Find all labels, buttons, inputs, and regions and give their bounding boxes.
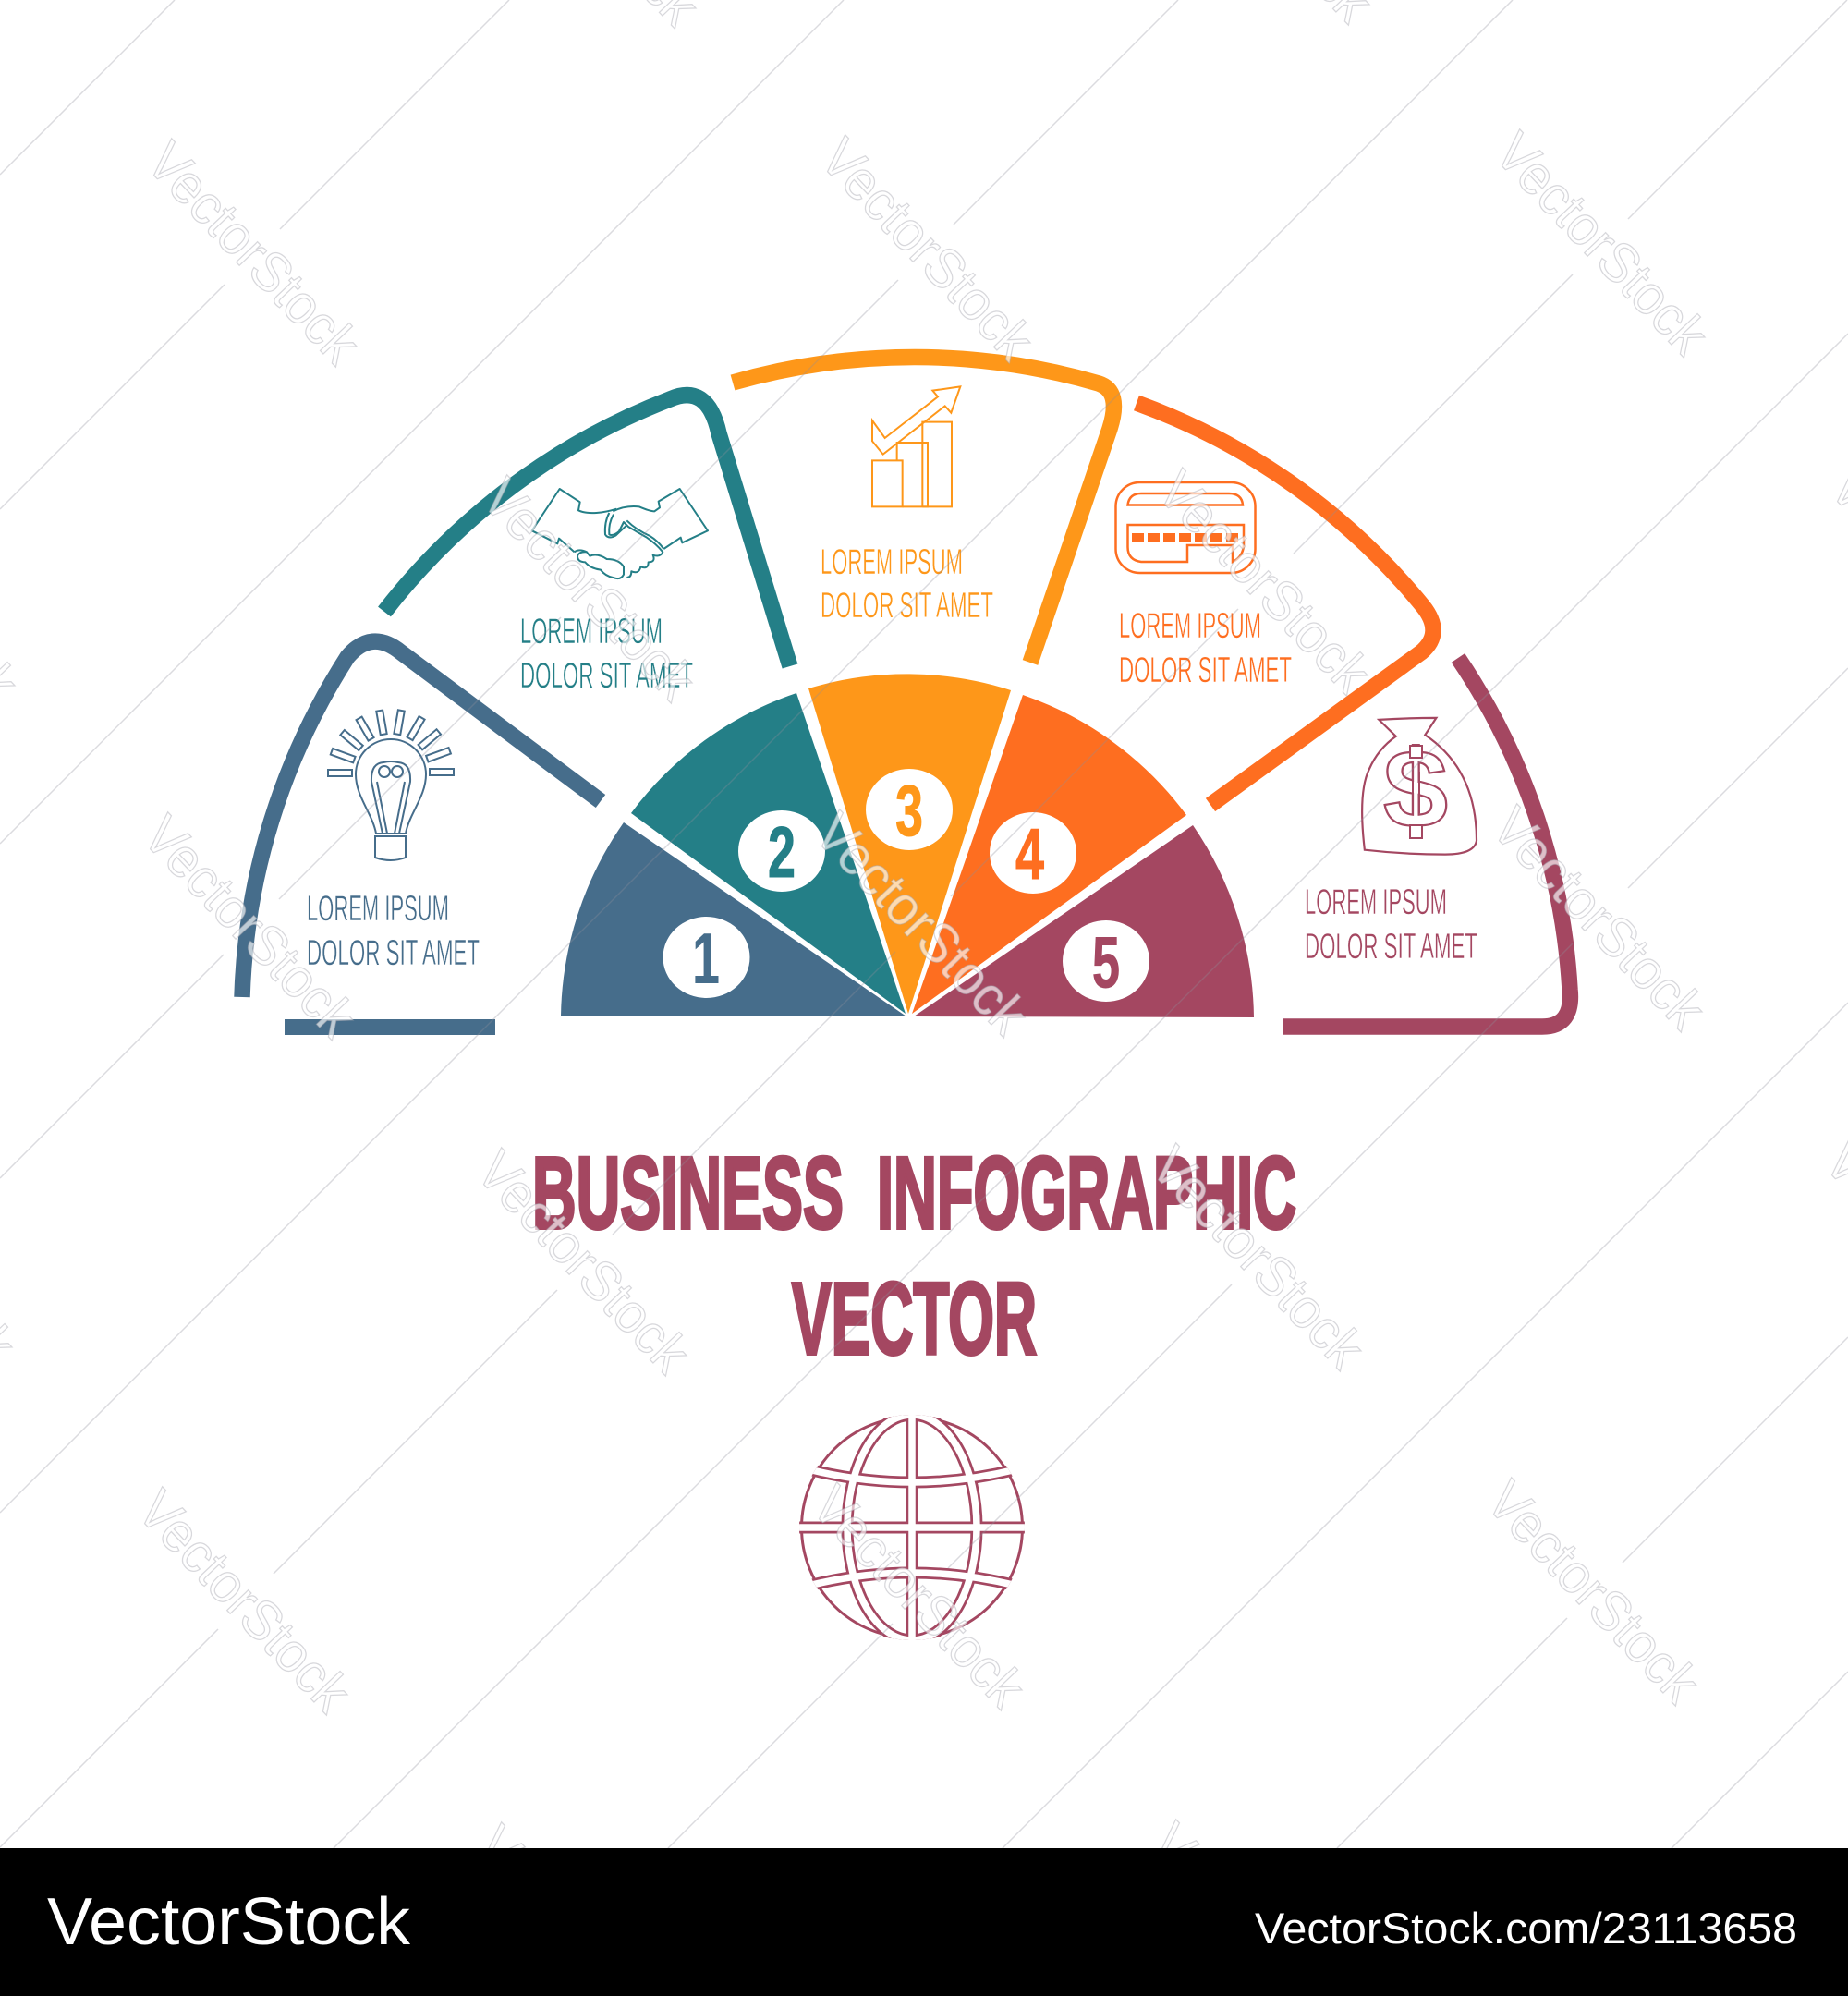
panel 1 base bar bbox=[285, 1019, 495, 1035]
badge 1 bbox=[663, 917, 750, 999]
watermark text: VectorStock bbox=[1146, 459, 1383, 705]
title: VECTOR bbox=[792, 1262, 1037, 1376]
icon: rising bar chart bbox=[872, 386, 960, 506]
panel 4: payment bbox=[1116, 403, 1433, 805]
wedge 3 bbox=[808, 674, 1011, 1014]
icon: globe bbox=[799, 1415, 1025, 1640]
panel 2: handshake bbox=[384, 396, 790, 696]
panel 4 outline bbox=[1137, 403, 1433, 805]
badge 3 bbox=[866, 769, 953, 851]
panel 4 text bbox=[1119, 606, 1292, 690]
watermark text: VectorStock bbox=[126, 1479, 363, 1724]
watermark text: VectorStock bbox=[470, 467, 708, 712]
panel 3: growth bbox=[733, 357, 1113, 663]
panel 2 outline bbox=[384, 396, 790, 666]
icon: handshake bbox=[532, 489, 708, 578]
badge 2 bbox=[738, 810, 825, 893]
panel 2 text: DOLOR SIT AMET bbox=[520, 656, 693, 696]
watermark text: VectorStock bbox=[1480, 796, 1718, 1041]
watermark text: VectorStock bbox=[800, 1474, 1038, 1720]
panel 2 text bbox=[520, 612, 693, 696]
wedge 4 bbox=[912, 695, 1186, 1014]
title: BUSINESS bbox=[532, 1137, 844, 1250]
panel 3 text: DOLOR SIT AMET bbox=[821, 586, 993, 626]
badge 4 bbox=[990, 812, 1076, 895]
badge 2: 2 bbox=[768, 811, 796, 893]
panel 5 text: DOLOR SIT AMET bbox=[1305, 927, 1477, 967]
panel 3 text: LOREM IPSUM bbox=[821, 542, 963, 582]
icon: money bag bbox=[1362, 718, 1477, 855]
badge 3: 3 bbox=[895, 770, 923, 851]
watermark text: VectorStock bbox=[1139, 1135, 1377, 1381]
panel 3 outline bbox=[733, 357, 1113, 663]
panel 1 text: DOLOR SIT AMET bbox=[307, 933, 480, 973]
watermark text: VectorStock bbox=[465, 1139, 702, 1385]
badge 5 bbox=[1063, 920, 1149, 1003]
watermark text: VectorStock bbox=[135, 130, 372, 376]
watermark text: VectorStock bbox=[131, 804, 369, 1050]
panel 3 text bbox=[821, 542, 993, 626]
title: INFOGRAPHIC bbox=[877, 1137, 1296, 1250]
badge 4: 4 bbox=[1015, 813, 1044, 895]
icon: credit card bbox=[1116, 482, 1255, 573]
wedge 2 bbox=[631, 693, 906, 1014]
badge 5: 5 bbox=[1092, 921, 1120, 1003]
panel 5: money bbox=[1283, 658, 1570, 1027]
footer band bbox=[0, 1848, 1848, 1996]
watermark text: VectorStock bbox=[803, 801, 1040, 1047]
panel 5 outline bbox=[1283, 658, 1570, 1027]
panel 5 text: LOREM IPSUM bbox=[1305, 882, 1447, 922]
watermark text: VectorStock bbox=[1483, 121, 1720, 367]
watermark text: VectorStock bbox=[1475, 1469, 1712, 1715]
title bbox=[532, 1137, 1296, 1376]
panel 1 text bbox=[307, 889, 480, 973]
semicircle fan chart bbox=[561, 674, 1254, 1017]
panel 2 text: LOREM IPSUM bbox=[520, 612, 663, 651]
wedge 1 bbox=[561, 822, 906, 1016]
panel 1: idea bbox=[242, 641, 601, 1035]
panel 4 text: DOLOR SIT AMET bbox=[1119, 651, 1292, 690]
panel 1 outline bbox=[242, 641, 601, 997]
wedge 5 bbox=[914, 825, 1254, 1017]
footer image id: VectorStock.com/23113658 bbox=[1255, 1904, 1797, 1953]
panel 5 text bbox=[1305, 882, 1477, 967]
watermark text: VectorStock bbox=[808, 127, 1046, 372]
panel 1 text: LOREM IPSUM bbox=[307, 889, 449, 929]
panel 4 text: LOREM IPSUM bbox=[1119, 606, 1261, 646]
badge 1: 1 bbox=[692, 918, 720, 999]
icon: money bag: $ bbox=[1383, 727, 1448, 851]
footer logo: VectorStock bbox=[47, 1885, 411, 1959]
icon: light bulb bbox=[328, 710, 454, 860]
